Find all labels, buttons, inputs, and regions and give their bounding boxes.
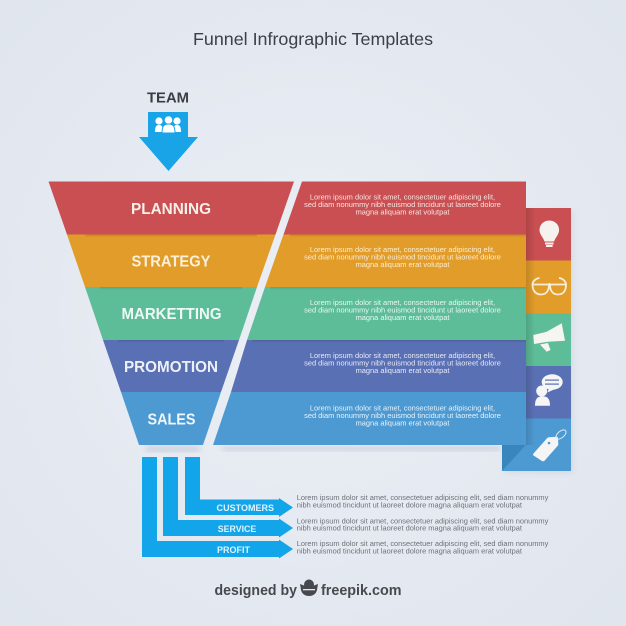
arrow: profit: PROFIT xyxy=(217,545,250,556)
text band: planning: magna aliquam erat volutpat xyxy=(356,208,450,216)
text band: marketting: magna aliquam erat volutpat xyxy=(356,313,450,322)
right band shadow xyxy=(222,446,500,451)
text band: sales: Lorem ipsum dolor sit amet, consectetuer adipiscing elit, xyxy=(310,404,495,412)
funnel band: marketting: MARKETTING xyxy=(122,306,222,323)
icon: glasses xyxy=(532,278,566,294)
funnel band: sales xyxy=(121,392,221,445)
arrow: profit xyxy=(142,457,293,558)
team arrow xyxy=(139,112,198,171)
arrow: service xyxy=(163,457,293,538)
text band: promotion: Lorem ipsum dolor sit amet, consectetuer adipiscing elit, xyxy=(310,351,495,360)
side strip shadow xyxy=(505,211,573,473)
arrow: service: SERVICE xyxy=(218,524,256,535)
footer credit: freepik.com xyxy=(321,583,402,599)
text block: profit: nibh euismod tincidunt ut laoreet dolore magna aliquam erat volutpat xyxy=(297,546,522,556)
icon: megaphone xyxy=(533,323,565,352)
funnel band: strategy: STRATEGY xyxy=(132,254,211,270)
text band: marketting: Lorem ipsum dolor sit amet, consectetuer adipiscing elit, xyxy=(310,298,495,307)
text band: promotion: sed diam nonummy nibh euismod tincidunt ut laoreet dolore xyxy=(304,358,501,368)
footer credit: designed by xyxy=(214,583,297,599)
funnel band: promotion: PROMOTION xyxy=(124,359,218,376)
footer credit xyxy=(214,580,402,599)
icon: person with speech bubble xyxy=(535,374,563,406)
text band: marketting: sed diam nonummy nibh euismod tincidunt ut laoreet dolore xyxy=(304,306,501,314)
text band: sales xyxy=(213,392,526,445)
icon: freepik logo xyxy=(300,580,318,596)
panel: left funnel xyxy=(48,182,294,445)
funnel band: marketting xyxy=(85,287,257,340)
text band: strategy: sed diam nonummy nibh euismod tincidunt ut laoreet dolore xyxy=(304,252,501,262)
funnel band: planning xyxy=(48,182,294,234)
text band: marketting xyxy=(247,287,526,340)
text band: planning: sed diam nonummy nibh euismod tincidunt ut laoreet dolore xyxy=(304,200,501,209)
text band: planning: Lorem ipsum dolor sit amet, consectetuer adipiscing elit, xyxy=(310,192,495,202)
text block: service: nibh euismod tincidunt ut laoreet dolore magna aliquam erat volutpat xyxy=(297,524,522,533)
text band: promotion: magna aliquam erat volutpat xyxy=(356,366,450,375)
title: Funnel Infrographic Templates xyxy=(193,29,433,49)
text band: sales: sed diam nonummy nibh euismod tincidunt ut laoreet dolore xyxy=(304,411,501,420)
text band: strategy xyxy=(265,234,526,287)
arrow: customers xyxy=(185,457,293,517)
icon: price tag xyxy=(533,428,568,461)
text block: service: Lorem ipsum dolor sit amet, consectetuer adipiscing elit, sed diam nonummy xyxy=(297,516,549,525)
text block: customers: nibh euismod tincidunt ut laoreet dolore magna aliquam erat volutpat xyxy=(297,500,522,509)
text band: sales: magna aliquam erat volutpat xyxy=(356,418,450,428)
panel: side icon strip xyxy=(502,208,571,471)
team label: TEAM xyxy=(147,90,189,106)
text band: promotion xyxy=(231,340,526,392)
text band: strategy: Lorem ipsum dolor sit amet, consectetuer adipiscing elit, xyxy=(310,245,495,254)
text band: strategy: magna aliquam erat volutpat xyxy=(356,260,450,269)
text block: customers: Lorem ipsum dolor sit amet, consectetuer adipiscing elit, sed diam nonummy xyxy=(297,493,549,502)
funnel band: planning: PLANNING xyxy=(131,201,211,218)
panel: right text bands xyxy=(213,182,526,445)
funnel band: sales: SALES xyxy=(148,412,196,428)
funnel band: strategy xyxy=(67,234,276,287)
text band: planning xyxy=(284,182,526,234)
funnel shadow xyxy=(146,446,200,452)
arrow: customers: CUSTOMERS xyxy=(217,503,274,514)
icon: light bulb xyxy=(540,220,559,247)
bottom arrows xyxy=(142,457,293,558)
icon: team people xyxy=(155,116,181,133)
funnel band: promotion xyxy=(103,340,239,392)
text block: profit: Lorem ipsum dolor sit amet, consectetuer adipiscing elit, sed diam nonummy xyxy=(297,539,549,548)
